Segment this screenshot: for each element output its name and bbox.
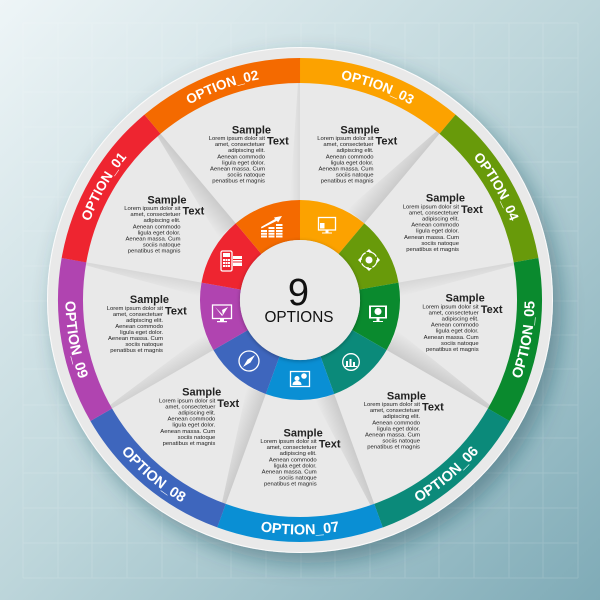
text block: option 08: ligula eget dolor. — [172, 423, 216, 429]
text block: option 05: ligula eget dolor. — [436, 329, 479, 335]
text block: option 09: Aenean massa. Cum — [108, 336, 163, 342]
centre caption: OPTIONS — [264, 309, 334, 326]
text block: option 06: Sample — [387, 390, 426, 402]
text block: option 05: sociis natoque — [441, 341, 479, 347]
text block: option 06: sociis natoque — [382, 438, 421, 444]
text block: option 09: amet, consectetuer — [113, 312, 163, 318]
text block: option 05: Sample — [446, 293, 485, 305]
text block: option 01: Aenean commodo — [133, 224, 181, 230]
text block: option 05: Lorem ipsum dolor sit — [422, 305, 479, 311]
label: option 07: OPTION_07 — [262, 521, 338, 536]
text block: option 05: Aenean massa. Cum — [424, 335, 479, 341]
text block: option 05 — [422, 293, 503, 353]
text block: option 09: penatibus et magnis — [110, 348, 163, 354]
text block: option 01: Text — [182, 206, 205, 218]
text block: option 02: amet, consectetuer — [215, 142, 265, 148]
text block: option 03: Sample — [340, 124, 380, 136]
text block: option 06: Text — [422, 402, 444, 414]
text block: option 04: penatibus et magnis — [406, 247, 459, 253]
text block: option 02: Aenean commodo — [217, 154, 266, 160]
text block: option 08: sociis natoque — [178, 435, 216, 441]
text block: option 09: Aenean commodo — [115, 324, 164, 330]
text block: option 07: sociis natoque — [279, 475, 317, 481]
text block: option 07: Aenean commodo — [269, 457, 317, 463]
centre circle — [240, 240, 360, 360]
text block: option 03: Text — [376, 136, 398, 148]
text block: option 04: adipiscing elit. — [422, 217, 459, 223]
text block: option 08: Lorem ipsum dolor sit — [159, 399, 216, 405]
text block: option 09: adipiscing elit. — [126, 318, 163, 324]
text block: option 09 — [107, 294, 187, 354]
text block: option 03: ligula eget dolor. — [331, 160, 374, 166]
icon: monitor with pie — [369, 306, 387, 322]
text block: option 07: Sample — [284, 427, 323, 439]
text block: option 08: Aenean massa. Cum — [160, 429, 215, 435]
icon: monitor with plant — [212, 305, 232, 322]
text block: option 09: Lorem ipsum dolor sit — [107, 306, 163, 312]
text block: option 03: Lorem ipsum dolor sit — [317, 136, 374, 142]
text block: option 02: penatibus et magnis — [212, 179, 265, 185]
text block: option 02: ligula eget dolor. — [222, 160, 265, 166]
text block: option 02: Lorem ipsum dolor sit — [209, 136, 265, 142]
text block: option 01: adipiscing elit. — [143, 218, 181, 224]
text block: option 04: amet, consectetuer — [409, 211, 459, 217]
text block: option 02: Sample — [232, 124, 271, 136]
text block: option 06: ligula eget dolor. — [377, 426, 420, 432]
text block: option 09: sociis natoque — [125, 342, 164, 348]
text block: option 06: Aenean massa. Cum — [365, 432, 420, 438]
text block: option 01: Sample — [147, 194, 186, 206]
text block: option 08: penatibus et magnis — [163, 441, 215, 447]
text block: option 07: amet, consectetuer — [267, 445, 317, 451]
text block: option 09: Sample — [130, 294, 169, 306]
text block: option 04: ligula eget dolor. — [416, 229, 459, 235]
text block: option 02: adipiscing elit. — [228, 148, 265, 154]
text block: option 01: Lorem ipsum dolor sit — [124, 206, 181, 212]
text block: option 07: ligula eget dolor. — [274, 463, 317, 469]
text block: option 07: Text — [319, 439, 341, 451]
text block: option 08 — [159, 387, 239, 447]
label: option 02: OPTION_02 — [186, 70, 259, 103]
text block: option 02 — [209, 124, 289, 184]
text block: option 04: Aenean commodo — [411, 223, 460, 229]
text block: option 01: amet, consectetuer — [130, 212, 181, 218]
label: option 06: OPTION_06 — [415, 446, 478, 501]
text block: option 03 — [317, 124, 398, 184]
text block: option 08: Aenean commodo — [167, 417, 216, 423]
icon: compass — [239, 351, 259, 371]
icon: picture frame with person — [290, 372, 310, 386]
text block: option 05: amet, consectetuer — [429, 311, 479, 317]
text block: option 08: Text — [217, 398, 239, 410]
wheel disc — [48, 48, 552, 552]
icon: target with bars — [343, 354, 359, 370]
text block: option 02: sociis natoque — [227, 172, 266, 178]
text block: option 04: Sample — [426, 193, 465, 205]
text block: option 07 — [260, 427, 341, 488]
text block: option 03: penatibus et magnis — [321, 179, 374, 185]
text block: option 01 — [124, 194, 205, 254]
text block: option 07: Aenean massa. Cum — [262, 469, 317, 475]
text block: option 06: adipiscing elit. — [383, 414, 420, 420]
text block: option 03: adipiscing elit. — [336, 148, 374, 154]
icon: phone and card — [221, 251, 242, 271]
text block: option 04: sociis natoque — [421, 241, 460, 247]
text block: option 03: Aenean massa. Cum — [318, 166, 374, 172]
label: option 01: OPTION_01 — [82, 153, 127, 220]
text block: option 03: Aenean commodo — [326, 154, 374, 160]
text block: option 03: amet, consectetuer — [323, 142, 374, 148]
text block: option 05: Aenean commodo — [431, 323, 479, 329]
text block: option 09: Text — [165, 305, 187, 317]
text block: option 03: sociis natoque — [336, 172, 374, 178]
label: option 03: OPTION_03 — [342, 70, 414, 104]
wedge fold shadows — [84, 83, 516, 511]
inner coloured ring — [181, 182, 414, 416]
text block: option 02: Aenean massa. Cum — [210, 166, 265, 172]
text block: option 04: Aenean massa. Cum — [404, 235, 459, 241]
text block: option 08: Sample — [182, 387, 221, 399]
text block: option 09: ligula eget dolor. — [120, 330, 163, 336]
label: option 08: OPTION_08 — [123, 447, 186, 502]
text block: option 07: penatibus et magnis — [264, 481, 317, 487]
text block: option 06 — [364, 390, 444, 450]
icon: rising bars and arrow — [261, 216, 282, 238]
text block: option 02: Text — [267, 136, 289, 148]
text block: option 05: Text — [481, 304, 503, 316]
label: option 05: OPTION_05 — [512, 301, 536, 378]
text block: option 07: Lorem ipsum dolor sit — [260, 439, 317, 445]
centre number: 9 — [288, 272, 309, 314]
text block: option 04 — [403, 193, 483, 253]
text block: option 06: Aenean commodo — [372, 420, 421, 426]
text block: option 05: adipiscing elit. — [442, 317, 479, 323]
text block: option 07: adipiscing elit. — [280, 451, 317, 457]
text block: option 06: Lorem ipsum dolor sit — [364, 402, 420, 408]
text block: option 08: adipiscing elit. — [178, 411, 216, 417]
label: option 04: OPTION_04 — [475, 153, 519, 221]
text block: option 08: amet, consectetuer — [165, 405, 215, 411]
text block: option 06: amet, consectetuer — [370, 408, 420, 414]
icon: monitor with chart (option 03) — [318, 218, 336, 234]
text block: option 06: penatibus et magnis — [367, 444, 420, 450]
text block: option 01: penatibus et magnis — [128, 249, 181, 255]
text block: option 04: Lorem ipsum dolor sit — [403, 204, 459, 210]
text block: option 01: sociis natoque — [143, 242, 181, 248]
icon: circular arrows — [358, 249, 380, 271]
label: option 09: OPTION_09 — [65, 302, 88, 378]
text block: option 05: penatibus et magnis — [426, 347, 479, 353]
text block: option 01: Aenean massa. Cum — [125, 236, 181, 242]
text block: option 04: Text — [461, 204, 483, 216]
text block: option 01: ligula eget dolor. — [138, 230, 181, 236]
